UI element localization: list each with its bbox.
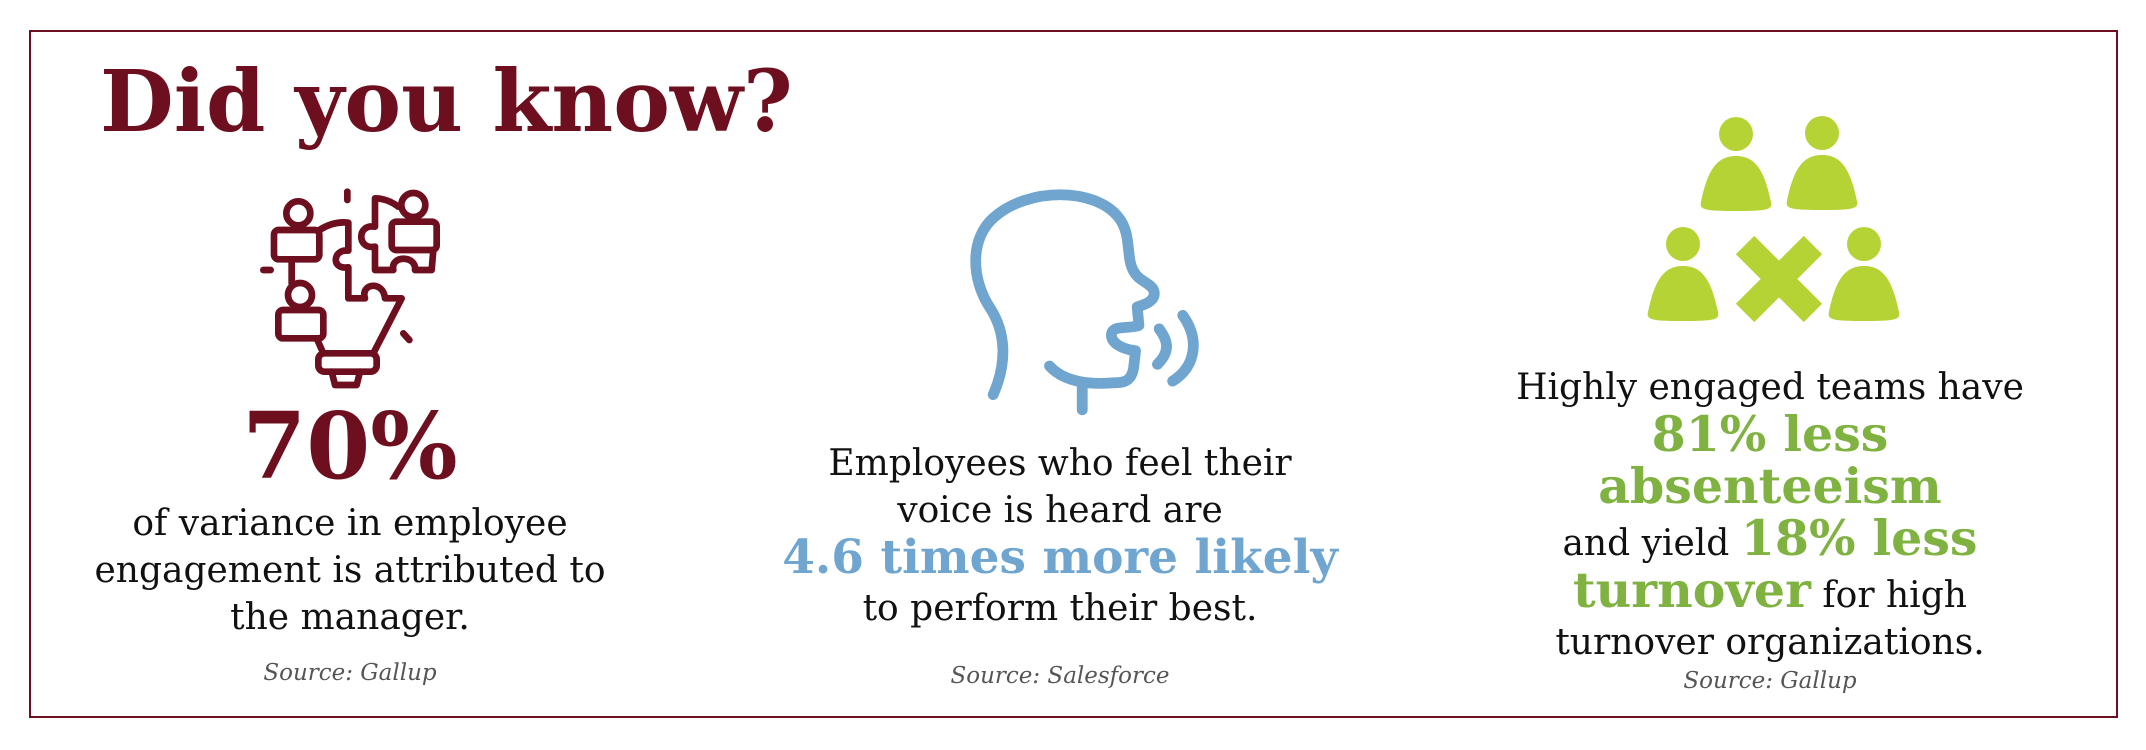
source: Gallup: Source: Gallup [1683, 668, 1857, 694]
text: engaged teams: 81% less [1652, 405, 1888, 463]
text: voice [782, 443, 1339, 629]
panel: voice [782, 189, 1339, 689]
text: engaged teams: absenteeism [1598, 457, 1942, 515]
text: manager: engagement is attributed to [94, 550, 606, 591]
stat: 70%: 70% [242, 392, 458, 500]
text: voice: to perform their best. [863, 588, 1257, 629]
icon: puzzle bulb people [260, 188, 440, 388]
panel: manager [94, 188, 606, 686]
text: engaged teams [1516, 367, 2024, 663]
text: engaged teams: turnover for high [1573, 561, 1967, 619]
title: Did you know? [100, 52, 793, 152]
text: manager: the manager. [230, 597, 470, 638]
panel: engaged teams [1516, 116, 2024, 694]
text: manager: of variance in employee [132, 503, 568, 544]
text: manager [94, 503, 606, 638]
text: voice: voice is heard are [897, 490, 1223, 531]
source: Salesforce: Source: Salesforce [950, 663, 1170, 689]
text: voice: Employees who feel their [828, 443, 1292, 484]
text: voice: 4.6 times more likely [782, 530, 1338, 585]
icon: people with x [1648, 116, 1900, 322]
icon: speaking head [970, 189, 1199, 416]
source: Gallup: Source: Gallup [263, 660, 437, 686]
text: engaged teams: and yield 18% less [1562, 509, 1978, 567]
text: engaged teams: Highly engaged teams have [1516, 367, 2024, 408]
text: engaged teams: turnover organizations. [1555, 622, 1985, 663]
